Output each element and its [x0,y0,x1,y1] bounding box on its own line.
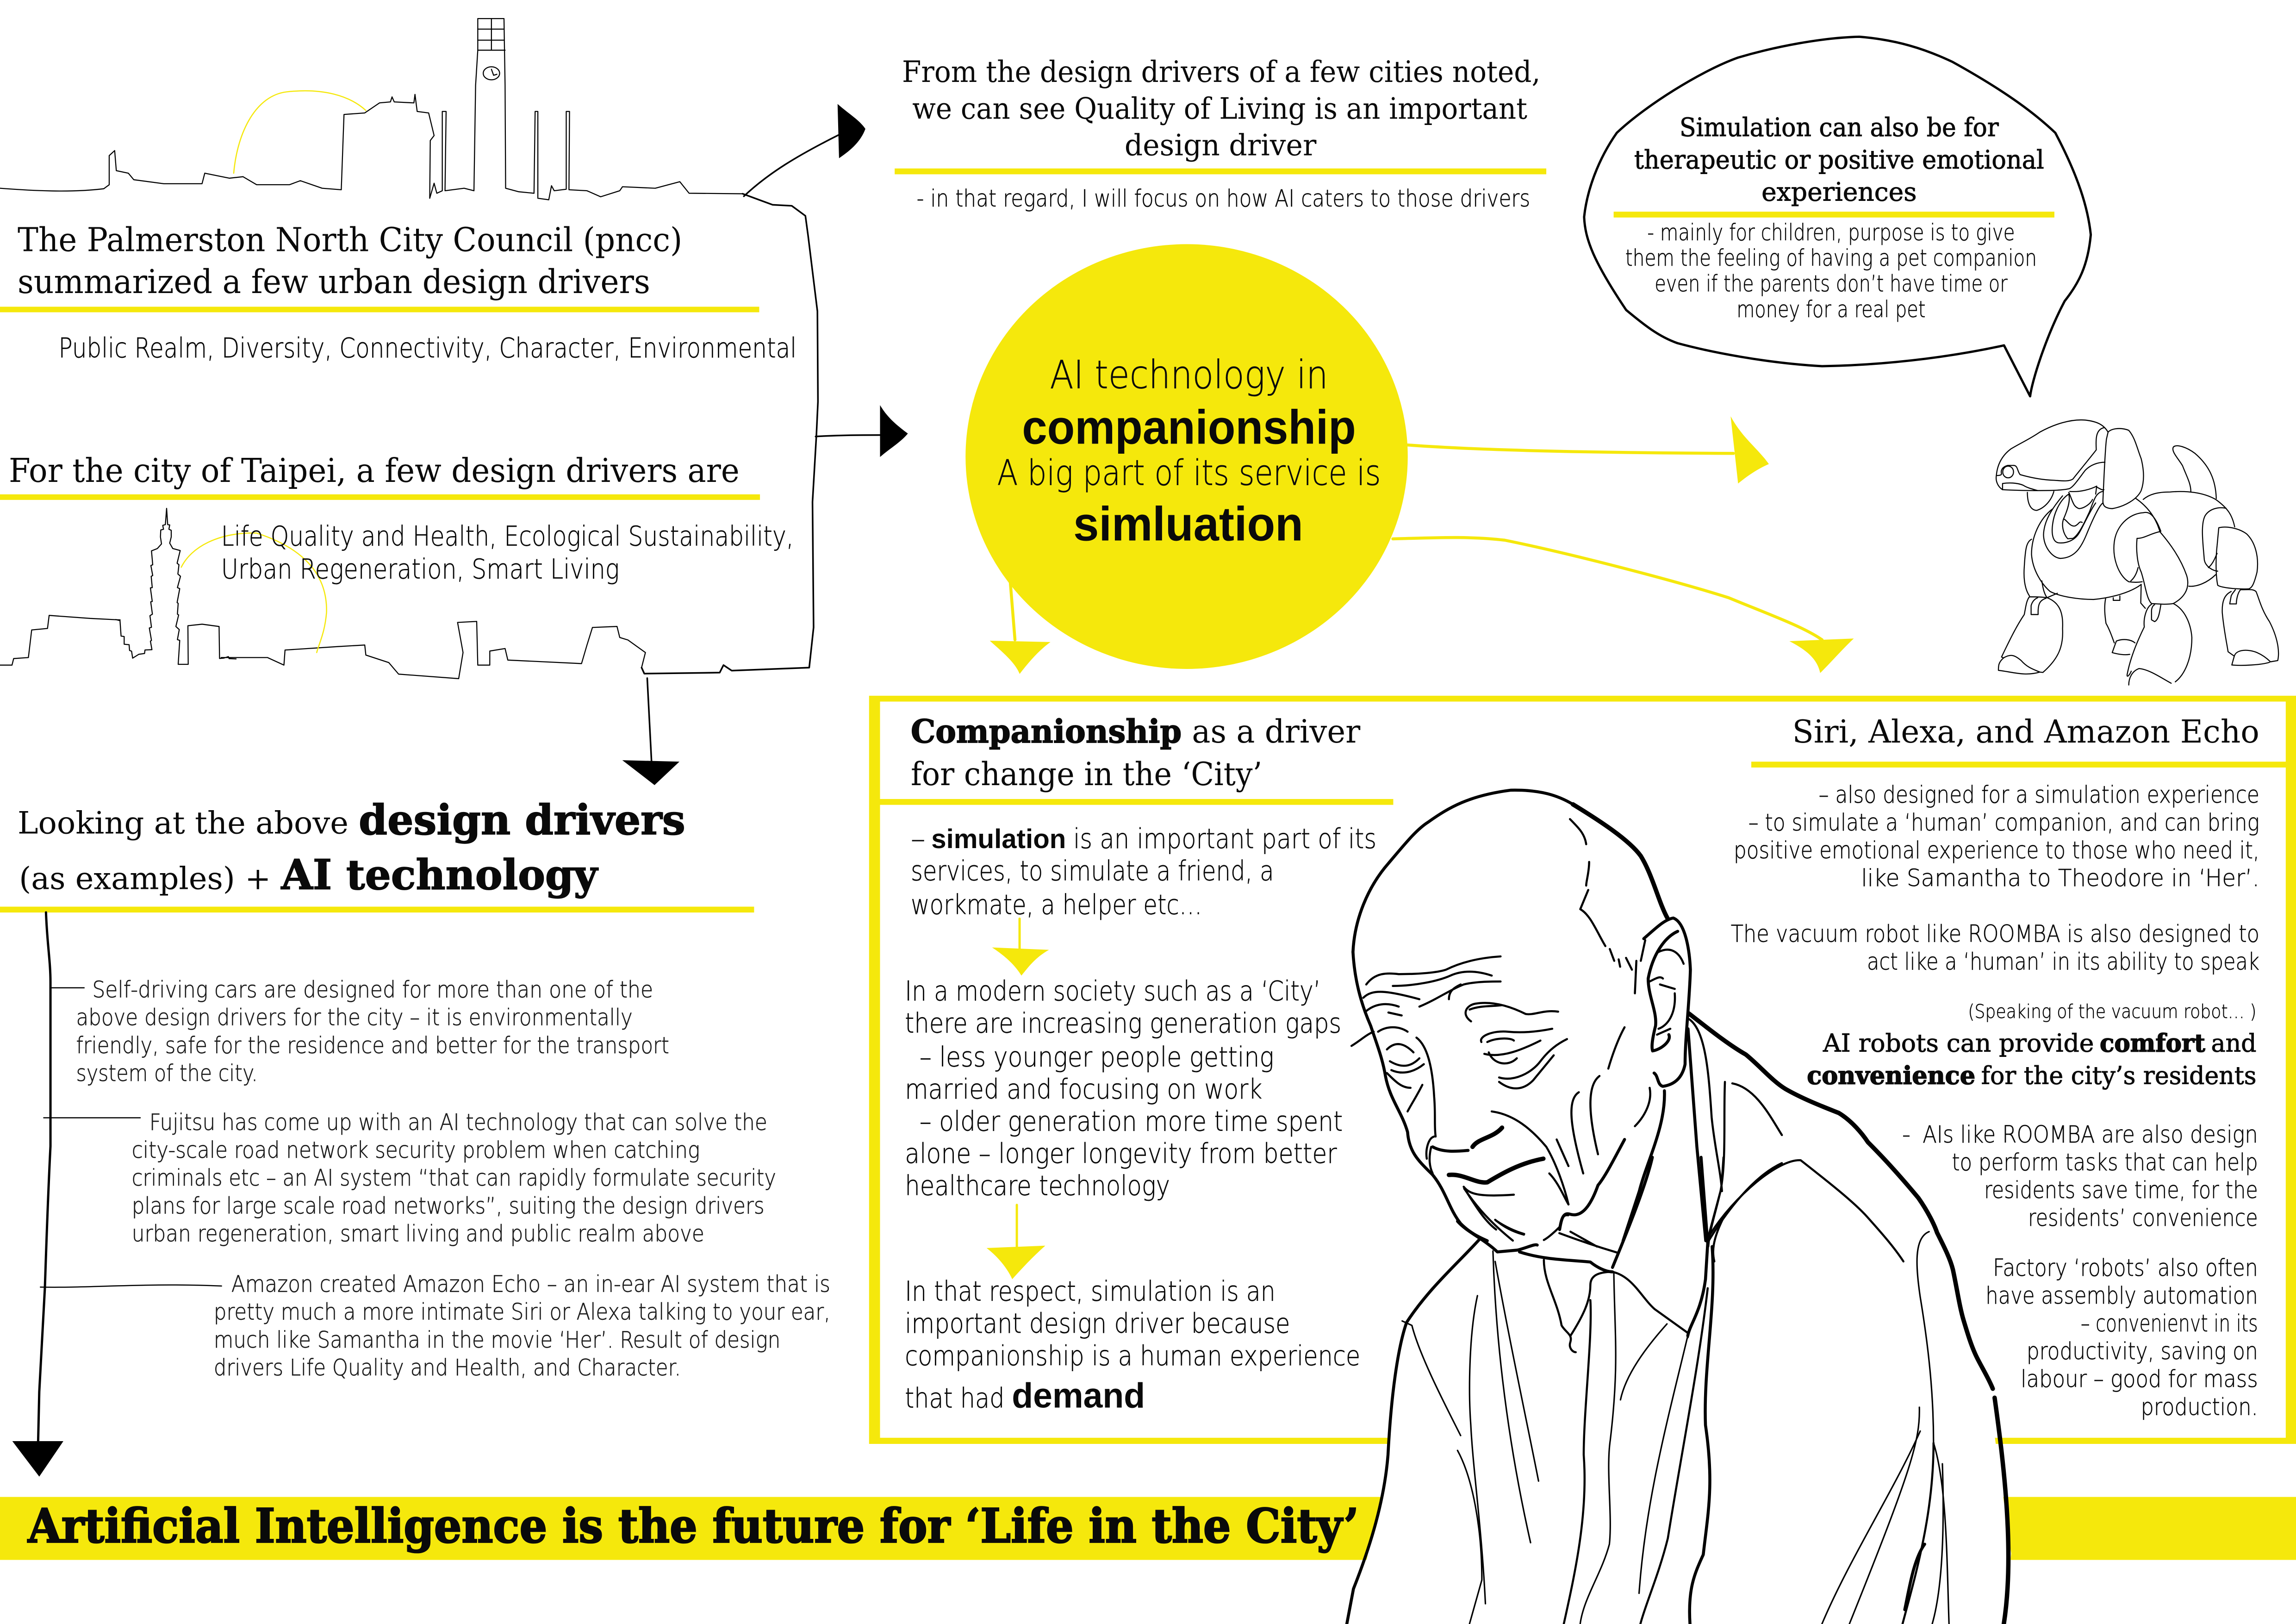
text: simulation part of services: workmate, a helper etc… [911,889,1202,920]
yellow circle: AI technology in companionship: companionship [1022,400,1356,455]
text: modern society generation gaps [905,975,1343,1202]
text: Fujitsu road network: criminals etc – an AI system “that can rapidly formulate security [132,1164,776,1191]
panel heading: as a driver [1192,713,1361,750]
text: AIs like ROOMBA: AIs like ROOMBA are also design [1923,1121,2258,1148]
text: factory robots: Factory ‘robots’ also often [1993,1254,2258,1281]
man's shoulder and back contour [1689,1013,1993,1389]
text: modern society generation gaps: – older generation more time spent [920,1106,1343,1137]
text: Amazon Echo [214,1271,830,1381]
heading: Palmerston North design drivers [0,221,759,312]
speech bubble: simulation for emotional experiences: therapeutic or positive emotional [1634,145,2044,175]
heading: design drivers plus AI technology: design drivers [359,796,685,844]
heading: Palmerston North design drivers: The Palmerston North City Council (pncc) [18,221,682,259]
text: Fujitsu road network: urban regeneration, smart living and public realm above [132,1220,704,1247]
line connecting skylines around the left text block [641,194,818,674]
text: modern society generation gaps: there are increasing generation gaps [905,1008,1341,1039]
text: simulation experience [1734,781,2259,892]
text: self-driving cars: friendly, safe for the residence and better for the transport [76,1032,669,1059]
icon: robot dog drawing [1996,420,2278,685]
text: AIs like ROOMBA [1902,1121,2258,1231]
panel heading [1751,714,2296,768]
text: comfort and convenience: comfort [2100,1029,2205,1058]
text: simulation is an important design driver [905,1276,1360,1416]
text: simulation part of services: – [911,823,926,855]
illustration: elderly man [1347,789,2011,1624]
man head and face lines [1351,790,1782,1241]
text: self-driving cars: Self-driving cars are designed for more than one of the [92,976,653,1003]
yellow arrows leaving the circle [990,416,1854,674]
text: simulation part of services [911,823,1376,920]
text: Amazon Echo: Amazon created Amazon Echo – an in-ear AI system that is [231,1271,830,1298]
text: Fujitsu road network: city-scale road network security problem when catching [132,1137,700,1163]
arrow: small yellow down 1 [992,919,1049,975]
text: factory robots: productivity, saving on [2027,1337,2258,1365]
yellow frame: companionship and Siri panels [869,696,2296,1444]
text: comfort and convenience [1807,1000,2257,1090]
text: self-driving cars [76,976,669,1087]
speech bubble: simulation for emotional experiences [1584,37,2091,396]
text: simulation is an important design driver: demand [1012,1376,1145,1416]
panel heading: for change in the ‘City’ [911,756,1262,793]
speech bubble: simulation for emotional experiences: - mainly for children, purpose is to give [1647,219,2015,246]
timeline arrow with branches [12,912,222,1477]
arrow: small yellow down 2 [987,1205,1045,1279]
text: simulation is an important design driver: that had [905,1383,1004,1414]
panel heading: Companionship [911,713,1182,750]
text: Taipei driver list: Life Quality and Health, Ecological Sustainability, [221,521,794,552]
man silhouette mask [1347,789,2011,1624]
man coat lines [1347,1157,1949,1624]
text: modern society generation gaps: – less younger people getting [920,1041,1274,1073]
text: simulation is an important design driver: companionship is a human experience [905,1340,1360,1372]
text: Amazon Echo: pretty much a more intimate Siri or Alexa talking to your ear, [214,1299,830,1325]
text: comfort and convenience: (Speaking of the vacuum robot… ) [1968,1000,2257,1023]
speech bubble: simulation for emotional experiences: them the feeling of having a pet companion [1625,244,2037,271]
heading: design drivers plus AI technology: (as examples) + [19,861,271,897]
text: comfort and convenience: for the city’s residents [1981,1061,2257,1090]
text: comfort and convenience: convenience [1807,1061,1975,1090]
heading: Palmerston North design drivers: summarized a few urban design drivers [18,262,650,301]
text: Taipei driver list [221,521,794,585]
text: modern society generation gaps: married and focusing on work [905,1074,1262,1105]
text: simulation is an important design driver: In that respect, simulation is an [905,1276,1276,1307]
heading: design drivers plus AI technology: AI technology [280,851,598,899]
yellow circle: AI technology in companionship: A big part of its service is [997,452,1381,493]
text: Taipei driver list: Urban Regeneration, Smart Living [221,554,619,585]
yellow circle: AI technology in companionship: simluation [1073,497,1303,551]
text: factory robots: production. [2141,1393,2258,1420]
title banner text: Artificial Intelligence is the future for ‘Life in the City’ [27,1499,1359,1554]
speech bubble: simulation for emotional experiences: experiences [1761,177,1917,207]
heading: design drivers plus AI technology [0,796,754,912]
text: Fujitsu road network: Fujitsu has come up with an AI technology that can solve the [149,1109,767,1136]
text: comfort and convenience: and [2211,1029,2257,1058]
speech bubble: simulation for emotional experiences: money for a real pet [1736,296,1926,323]
heading: design drivers plus AI technology: Looking at the above [18,805,348,841]
statement: quality of living [895,55,1546,212]
text: comfort and convenience: AI robots can provide [1823,1029,2094,1058]
skyline: Palmerston North with clock tower [0,19,743,200]
text: vacuum robot [1731,920,2259,975]
text: factory robots [1985,1254,2258,1420]
text: simulation part of services: simulation [931,824,1066,854]
text: Fujitsu road network: plans for large scale road networks”, suiting the design drivers [132,1192,765,1219]
arrow: skyline to top statement [744,104,865,196]
text: Amazon Echo: drivers Life Quality and Health, and Character. [214,1354,681,1381]
text: simulation is an important design driver: important design driver because [905,1308,1290,1339]
text: Palmerston North driver list: Public Realm, Diversity, Connectivity, Character, Environmental [59,332,796,364]
arrow: skyline down to design drivers heading [622,678,679,785]
speech bubble: simulation for emotional experiences: Simulation can also be for [1680,113,1999,143]
yellow circle: AI technology in companionship [965,244,1408,669]
text: self-driving cars: system of the city. [76,1060,258,1087]
text: modern society generation gaps: In a modern society such as a ‘City’ [905,975,1321,1007]
text: factory robots: labour – good for mass [2021,1365,2258,1393]
panel heading [880,713,1393,805]
text: simulation part of services: services, to simulate a friend, a [911,856,1274,887]
text: AIs like ROOMBA: - [1902,1121,1910,1148]
text: simulation part of services: is an important part of its [1073,823,1376,855]
text: Fujitsu road network [132,1109,776,1247]
text: factory robots: have assembly automation [1985,1282,2258,1309]
speech bubble: simulation for emotional experiences: even if the parents don’t have time or [1655,270,2008,297]
statement: quality of living: design driver [1125,128,1317,162]
panel: companionship as a driver [880,713,1393,1416]
heading: Taipei design drivers: For the city of Taipei, a few design drivers are [9,451,740,490]
text: modern society generation gaps: alone – longer longevity from better [905,1138,1337,1169]
skyline: Taipei with Taipei 101 [0,508,646,679]
statement: quality of living: From the design drivers of a few cities noted, [902,55,1540,89]
statement: quality of living: - in that regard, I will focus on how AI caters to those drivers [917,185,1530,212]
text: Amazon Echo: much like Samantha in the movie ‘Her’. Result of design [214,1326,780,1353]
text: simulation experience: like Samantha to Theodore in ‘Her’. [1861,864,2259,892]
text: AIs like ROOMBA: residents’ convenience [2028,1204,2258,1231]
statement: quality of living: we can see Quality of Living is an important [912,91,1527,125]
panel heading: Siri, Alexa, and Amazon Echo [1792,714,2259,750]
banner background [0,1497,2296,1560]
man's lower back line [1995,1398,2009,1624]
arrow: left block to AI circle [815,405,908,457]
text: modern society generation gaps: healthcare technology [905,1170,1170,1202]
yellow circle: AI technology in companionship: AI technology in [1050,352,1328,397]
text: self-driving cars: above design drivers for the city – it is environmentally [76,1004,633,1031]
panel: Siri, Alexa, and Amazon Echo [1731,714,2296,1420]
